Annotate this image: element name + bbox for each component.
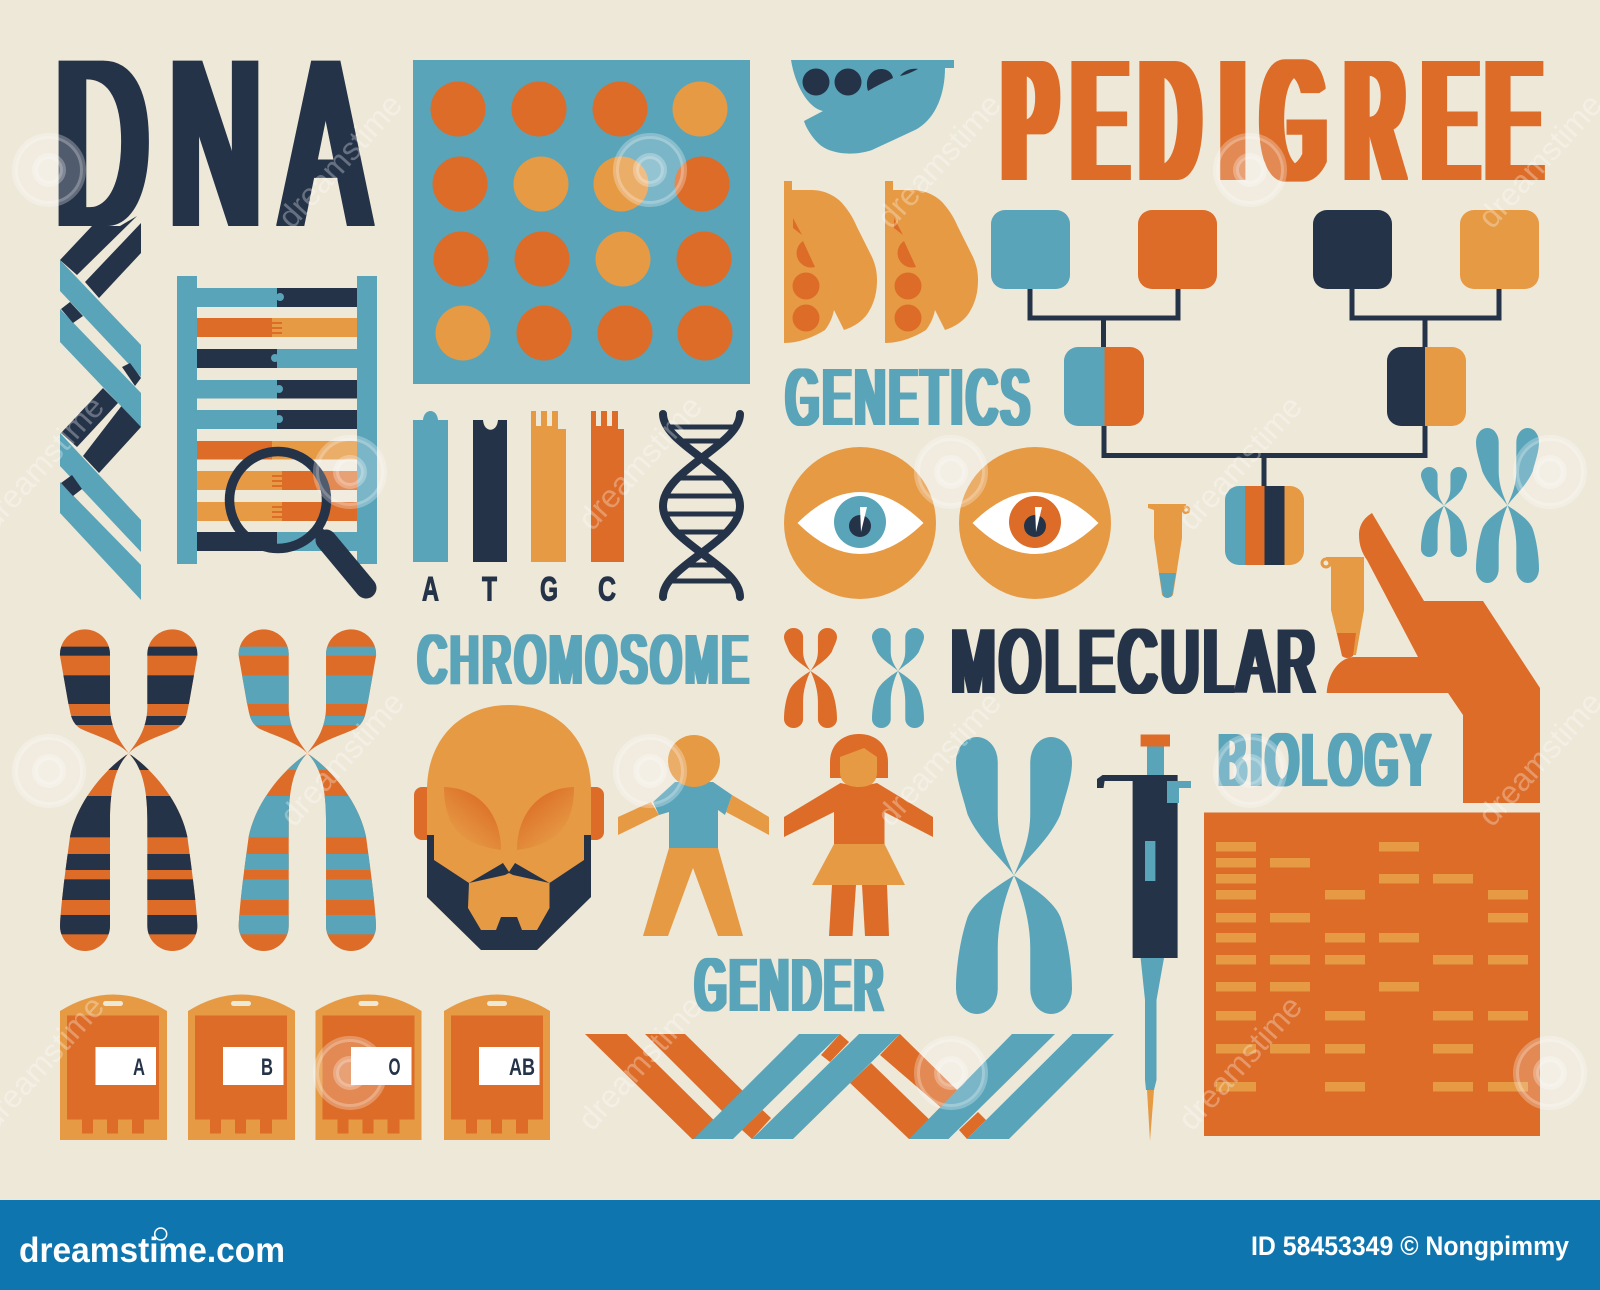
watermark: dreamstime diagonal text: dreamstime [870,86,1008,235]
icon: small teal chromosome pair [1421,428,1539,583]
icon: large teal chromosome [956,737,1072,1014]
footer bar [0,1200,1600,1290]
heading: DNA [56,10,367,276]
watermark: dreamstime diagonal text: dreamstime [571,388,709,537]
heading: BIOLOGY: BIOLOGY [1219,718,1434,802]
icon: blood bag A: A [133,1054,145,1081]
icon: blood bag AB [444,994,550,1140]
icon: blue pea pod [791,60,954,154]
icon: orange pea pods [784,181,978,343]
heading: CHROMOSOME: CHROMOSOME [418,620,752,698]
icon: blood bag O [316,994,422,1140]
icon: hand holding tube [1322,513,1540,803]
watermark: dreamstime diagonal text: dreamstime [271,86,409,235]
heading: MOLECULAR: MOLECULAR [952,612,1320,712]
chart: pedigree tree [991,210,1539,565]
icon: ATGC nucleotide bars: C [598,570,616,608]
icon: ATGC nucleotide bars: T [482,570,497,608]
watermark: dreamstime diagonal text: dreamstime [1171,988,1309,1137]
icon: left DNA ribbon helix [60,216,141,600]
watermark: dreamstime diagonal text: dreamstime [1171,388,1309,537]
watermark: dreamstime diagonal text: dreamstime [273,684,411,833]
watermark: spirals [15,136,1584,1107]
heading: PEDIGREE: PEDIGREE [1004,26,1539,215]
heading: DNA: A [284,10,367,276]
icon: pipette [1097,734,1191,1141]
icon: ATGC nucleotide bars: A [422,570,439,608]
panel: electrophoresis gel [1204,812,1540,1136]
icon: horizontal DNA ribbon [585,1034,1114,1139]
heading: GENDER: GENDER [696,944,887,1026]
icon: blood bag O: O [388,1054,400,1081]
icon: small orange chromosome [784,628,837,728]
icon: girl figure [784,734,933,936]
icon: small test tube [1148,504,1189,598]
watermark: dreamstime diagonal text: dreamstime [571,988,709,1137]
icon: double helix [663,414,740,597]
icon: striped navy chromosome [60,629,198,951]
watermark: dreamstime diagonal text: dreamstime [870,684,1008,833]
heading: GENETICS: GENETICS [786,352,1033,442]
icon: blood bag B: B [261,1054,273,1081]
heading: DNA: D [56,10,147,276]
icon: blue eye [784,447,936,599]
icon: striped teal chromosome [238,629,376,951]
icon: ATGC nucleotide bars [413,411,624,608]
icon: brown eye [959,447,1111,599]
icon: ATGC nucleotide bars: G [540,570,558,608]
icon: blood bag B [188,994,295,1140]
icon: small teal chromosome [872,628,924,728]
footer logo: dreamstime.com: dreamstime.com [19,1231,285,1270]
panel: Punnett square of dots [413,60,750,384]
icon: bearded head [414,705,604,950]
footer credit: ID 58453349 © Nongpimmy [1251,1231,1569,1261]
icon: blood bag AB: AB [509,1054,535,1081]
icon: DNA ladder with magnifying glass [177,276,377,588]
heading: DNA: N [170,10,260,276]
icon: blood bag A [60,994,167,1140]
icon: boy figure [618,735,769,936]
